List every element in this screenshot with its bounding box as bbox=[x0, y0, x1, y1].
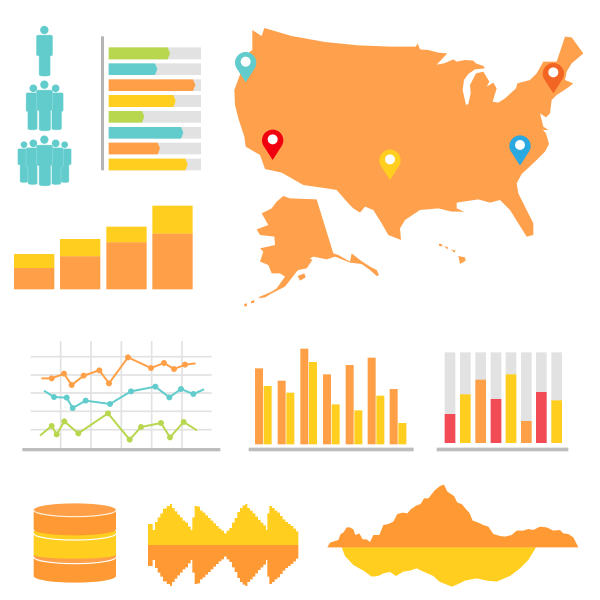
icon: group of three people bbox=[26, 80, 63, 131]
chart: mirrored stepped waveform bbox=[148, 504, 298, 586]
icon: single person bbox=[36, 26, 53, 76]
area: orange upper bbox=[327, 485, 578, 547]
icon: orange pin bbox=[543, 63, 564, 93]
chart: horizontal progress bars bbox=[101, 36, 201, 170]
chart: stacked rising columns bbox=[14, 206, 193, 289]
icon: blue pin bbox=[509, 135, 531, 166]
icon: teal pin bbox=[235, 52, 256, 82]
map: Hawaii bbox=[439, 244, 466, 264]
panel: people icons bbox=[18, 26, 71, 186]
line: teal series bbox=[44, 384, 204, 411]
icon: red pin bbox=[262, 130, 283, 160]
icon: yellow pin bbox=[379, 150, 401, 180]
map pins bbox=[235, 52, 564, 180]
line: orange series bbox=[41, 354, 196, 388]
chart: filled column gauges bbox=[437, 352, 568, 451]
area: yellow lower bbox=[342, 547, 536, 587]
icon: database cylinder bbox=[34, 503, 116, 583]
chart: mirrored mountain area chart bbox=[327, 485, 578, 587]
icon: group of five people bbox=[18, 135, 71, 186]
line: green series bbox=[40, 410, 197, 443]
map: United States bbox=[234, 28, 583, 307]
chart: grouped bar chart bbox=[249, 349, 414, 451]
map: mainland bbox=[234, 28, 583, 240]
map: Alaska bbox=[257, 196, 379, 298]
chart: line chart bbox=[22, 341, 220, 451]
